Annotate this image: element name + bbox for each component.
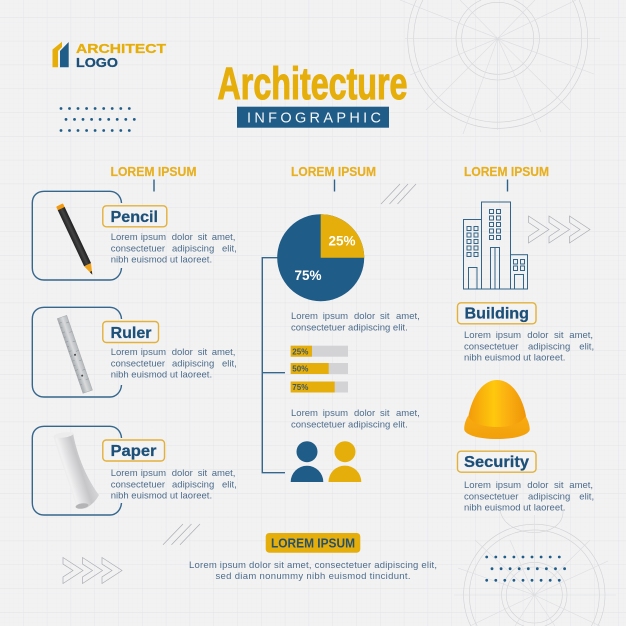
text: pencil description: amet, xyxy=(212,232,235,243)
pie chart xyxy=(277,214,364,301)
panel: security xyxy=(458,451,594,514)
text: paper description: adipiscing xyxy=(172,479,214,490)
subtitle banner xyxy=(237,107,389,128)
decoration: diagonal lines bottom xyxy=(163,524,200,545)
decoration: blueprint circle bottom right xyxy=(454,510,616,626)
text: chart description: sit xyxy=(380,311,390,322)
icon: people xyxy=(291,441,361,482)
text: building description: sit xyxy=(554,330,564,341)
text: ruler description: dolor xyxy=(172,347,193,358)
text: footer description: Lorem ipsum dolor sit amet, consectetuer adipiscing elit, xyxy=(189,560,437,571)
text: pencil description: nibh euismod ut laoreet. xyxy=(111,255,212,266)
text: pencil description: dolor xyxy=(172,232,193,243)
icon frame: paper xyxy=(32,426,121,515)
text: chart description: Lorem xyxy=(291,311,318,322)
icon frame: pencil xyxy=(32,191,121,280)
text: building description: amet, xyxy=(569,330,593,341)
label: Building: Building xyxy=(464,306,529,322)
text: security description: consectetuer xyxy=(464,491,518,502)
text: building description: nibh euismod ut laoreet. xyxy=(464,353,565,364)
pie chart: 25% xyxy=(328,234,356,248)
text: building description: consectetuer xyxy=(464,341,518,352)
logo mark xyxy=(52,42,69,67)
label: Ruler xyxy=(103,322,158,342)
decoration: chevrons top right xyxy=(528,216,590,243)
text: bars description: sit xyxy=(380,408,390,419)
text: paper description: elit, xyxy=(222,479,237,490)
text: bars description: amet, xyxy=(396,408,420,419)
logo wordmark: LOGO xyxy=(76,55,118,70)
text: paper description: consectetuer xyxy=(111,479,165,490)
decoration: dot grid bottom right xyxy=(485,556,566,582)
text: pencil description: sit xyxy=(198,232,208,243)
text: bars description: Lorem xyxy=(291,408,318,419)
text: security description: elit, xyxy=(579,491,594,502)
text: bars description: dolor xyxy=(354,408,375,419)
text: ruler description: nibh euismod ut laoreet. xyxy=(111,370,212,381)
panel: pencil xyxy=(32,191,237,280)
text: paper description: sit xyxy=(198,468,208,479)
footer heading pill: LOREM IPSUM xyxy=(271,536,355,550)
text: chart description: amet, xyxy=(396,311,420,322)
text: ruler description: elit, xyxy=(222,358,237,369)
text: ruler description: ipsum xyxy=(141,347,166,358)
text: chart description: dolor xyxy=(354,311,375,322)
panel: building xyxy=(458,303,594,364)
label: Ruler: Ruler xyxy=(110,325,152,342)
text: building description: adipiscing xyxy=(528,341,570,352)
text: pencil description: elit, xyxy=(222,243,237,254)
decoration: diagonal lines top xyxy=(381,184,416,204)
bar chart: 50% xyxy=(292,365,308,374)
decoration: blueprint circle top right xyxy=(400,0,600,134)
text: pencil description: adipiscing xyxy=(172,243,214,254)
text: security description: sit xyxy=(554,480,564,491)
text: footer description: sed diam nonummy nibh euismod tincidunt. xyxy=(216,571,410,582)
text: pencil description: Lorem xyxy=(111,232,138,243)
text: ruler description: Lorem xyxy=(111,347,138,358)
text: security description: amet, xyxy=(569,480,593,491)
text: building description: Lorem xyxy=(464,330,491,341)
label: Security: Security xyxy=(464,454,529,471)
text: ruler description: sit xyxy=(198,347,208,358)
text: building description: elit, xyxy=(579,341,594,352)
bar chart: 25% xyxy=(292,347,308,356)
footer heading pill xyxy=(266,533,360,553)
column heading: left xyxy=(110,165,196,192)
bar chart xyxy=(291,346,348,392)
logo wordmark xyxy=(76,41,166,70)
text: security description: ipsum xyxy=(496,480,521,491)
text: security description: adipiscing xyxy=(528,491,570,502)
decoration: dot grid top left xyxy=(60,107,136,132)
icon: ruler xyxy=(57,315,92,393)
text: security description: dolor xyxy=(527,480,548,491)
title: Architecture xyxy=(218,58,408,109)
text: chart description: consectetuer adipiscing elit. xyxy=(291,322,408,333)
text: ruler description: amet, xyxy=(212,347,235,358)
connector lines xyxy=(262,258,285,473)
label: Paper xyxy=(103,440,164,461)
text: pencil description: consectetuer xyxy=(111,243,165,254)
text: pencil description: ipsum xyxy=(141,232,166,243)
icon: buildings xyxy=(464,202,528,289)
subtitle banner: INFOGRAPHIC xyxy=(247,110,381,126)
column heading: right: LOREM IPSUM xyxy=(464,165,549,179)
icon: pencil xyxy=(56,203,96,276)
text: ruler description: adipiscing xyxy=(172,358,214,369)
text: paper description: ipsum xyxy=(141,468,166,479)
icon frame: ruler xyxy=(32,307,121,397)
bar chart: 75% xyxy=(292,383,308,392)
decoration: chevrons bottom left xyxy=(63,558,122,584)
icon: paper roll xyxy=(53,431,99,509)
pie chart: 75% xyxy=(294,268,322,283)
column heading: center xyxy=(291,165,376,192)
column heading: left: LOREM IPSUM xyxy=(110,165,196,179)
text: building description: ipsum xyxy=(496,330,521,341)
text: paper description: Lorem xyxy=(111,468,138,479)
panel: paper xyxy=(32,426,237,515)
label: Paper: Paper xyxy=(110,443,156,460)
logo xyxy=(52,41,166,70)
text: building description: dolor xyxy=(527,330,548,341)
panel: ruler xyxy=(32,307,237,397)
column heading: center: LOREM IPSUM xyxy=(291,165,376,179)
text: ruler description: consectetuer xyxy=(111,358,165,369)
text: paper description: amet, xyxy=(212,468,235,479)
logo wordmark: ARCHITECT xyxy=(76,41,166,56)
text: footer description xyxy=(189,560,437,582)
label: Pencil: Pencil xyxy=(110,209,158,226)
text: bars description: ipsum xyxy=(323,408,348,419)
text: security description: nibh euismod ut laoreet. xyxy=(464,503,565,514)
column heading: right xyxy=(464,165,549,192)
text: chart description: ipsum xyxy=(323,311,348,322)
icon: hard hat xyxy=(464,380,530,439)
text: security description: Lorem xyxy=(464,480,491,491)
text: paper description: dolor xyxy=(172,468,193,479)
label: Pencil xyxy=(103,206,167,227)
text: paper description: nibh euismod ut laoreet. xyxy=(111,491,212,502)
text: bars description: consectetuer adipiscing elit. xyxy=(291,419,408,430)
